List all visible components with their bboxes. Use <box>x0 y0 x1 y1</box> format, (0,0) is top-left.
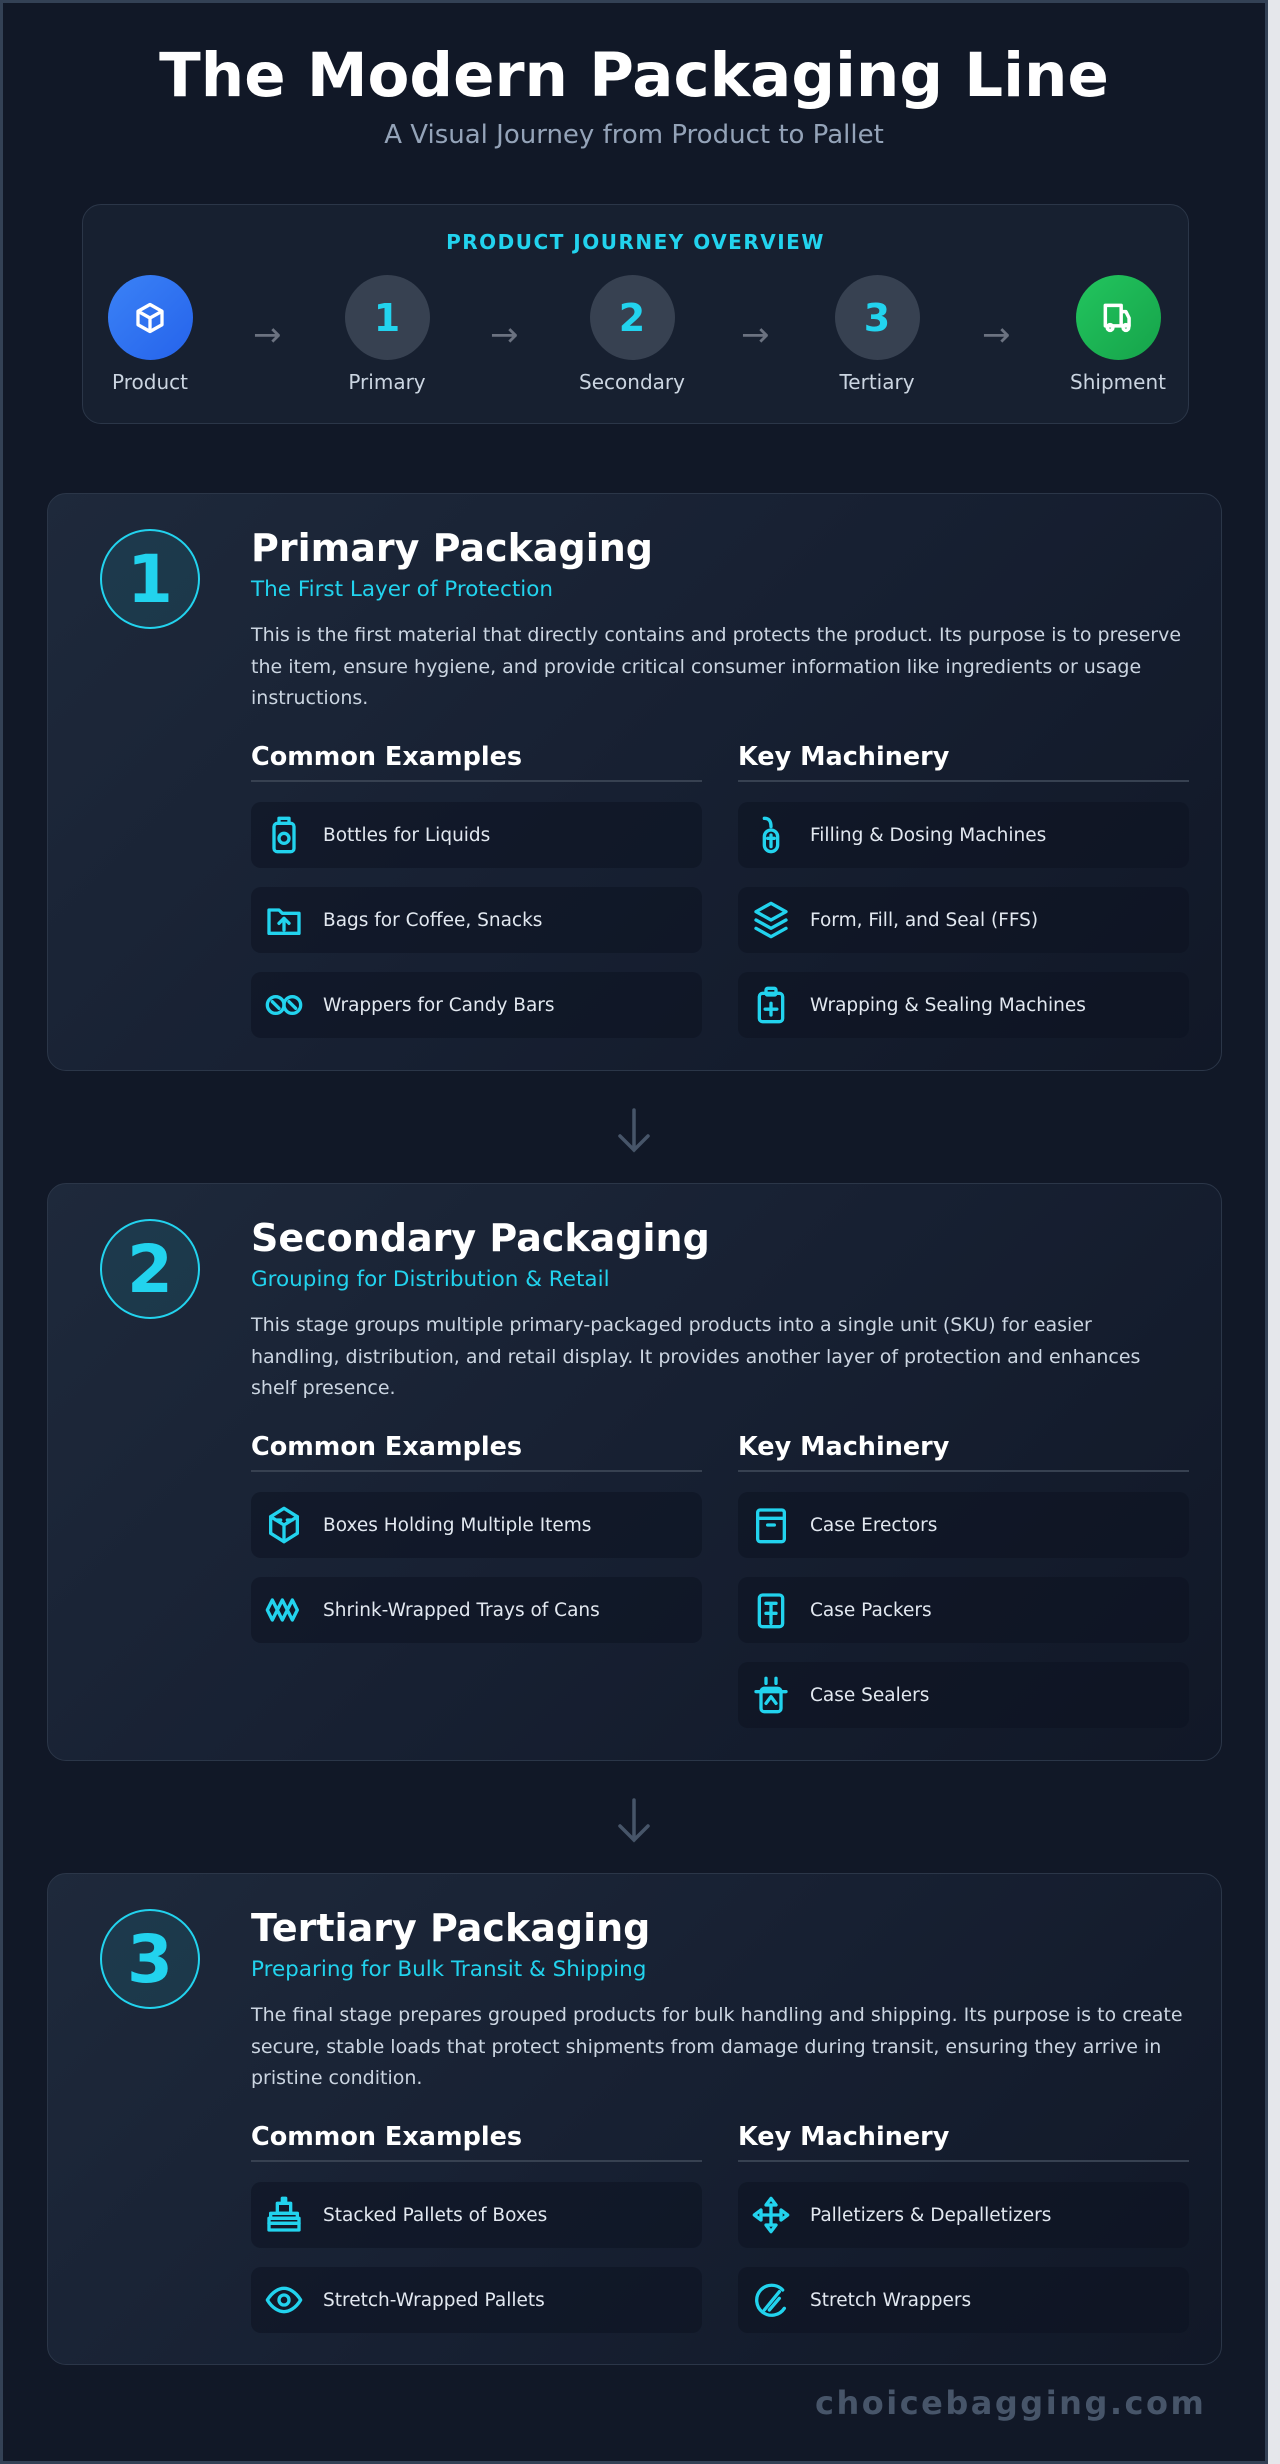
description: pristine condition. <box>251 2067 422 2089</box>
arrow: → <box>982 315 1010 355</box>
item: bottles: Bottles for Liquids <box>323 824 490 846</box>
item: trays: Shrink-Wrapped Trays of Cans <box>323 1600 600 1620</box>
description: instructions. <box>251 687 368 709</box>
column: key machinery: Key Machinery <box>738 742 949 772</box>
step number 1 <box>100 529 200 629</box>
subtitle: A Visual Journey from Product to Pallet <box>384 120 884 150</box>
step: tertiary <box>835 275 920 394</box>
column: common examples <box>251 742 702 1038</box>
arrow: → <box>490 315 518 355</box>
arrow: down <box>618 1108 650 1152</box>
item: wrappers <box>251 972 702 1038</box>
description: shelf presence. <box>251 1377 396 1399</box>
arrow: → <box>741 315 770 355</box>
step number 3: 3 <box>127 1920 173 1998</box>
item: wrappers: Wrappers for Candy Bars <box>323 994 555 1016</box>
step: secondary: 2 <box>619 296 645 340</box>
item: FFS: Form, Fill, and Seal (FFS) <box>810 910 1038 930</box>
description: secure, stable loads that protect shipments from damage during transit, ensuring they arrive in <box>251 2036 1161 2058</box>
step: primary: 1 <box>374 296 400 340</box>
column: common examples <box>251 2122 702 2333</box>
item: boxes: Boxes Holding Multiple Items <box>323 1514 591 1536</box>
item: stretch-wrapped pallets <box>251 2267 702 2333</box>
step number 2 <box>100 1219 200 1319</box>
panel: tertiary packaging <box>47 1873 1222 2365</box>
item: stretch wrappers: Stretch Wrappers <box>810 2290 971 2310</box>
step number 3 <box>100 1909 200 2009</box>
item: trays <box>251 1577 702 1643</box>
overview heading: PRODUCT JOURNEY OVERVIEW <box>446 230 825 254</box>
item: case packers <box>738 1577 1189 1643</box>
description <box>250 1314 1140 1399</box>
item: case erectors <box>738 1492 1189 1558</box>
item: stacked pallets: Stacked Pallets of Boxes <box>323 2204 547 2226</box>
item: stretch-wrapped pallets: Stretch-Wrapped Pallets <box>323 2290 545 2310</box>
title: The Modern Packaging Line <box>159 40 1109 111</box>
description <box>250 2004 1183 2089</box>
item: stretch wrappers <box>738 2267 1189 2333</box>
column: key machinery <box>738 2122 1189 2317</box>
column: common examples: Common Examples <box>251 1432 522 1462</box>
item: bags: Bags for Coffee, Snacks <box>323 910 542 930</box>
description: This is the first material that directly contains and protects the product. Its purpose is to preserve <box>251 624 1181 646</box>
step: secondary <box>579 275 685 394</box>
step: tertiary: Tertiary <box>839 370 915 394</box>
heading: Secondary Packaging <box>251 1216 710 1260</box>
subheading: Preparing for Bulk Transit & Shipping <box>251 1957 646 1982</box>
subheading: Grouping for Distribution & Retail <box>251 1267 610 1292</box>
description: handling, distribution, and retail display. It provides another layer of protection and enhances <box>251 1346 1140 1368</box>
item: case sealers: Case Sealers <box>810 1684 929 1706</box>
column: key machinery <box>738 1432 1189 1714</box>
item: bottles <box>251 802 702 868</box>
column: key machinery: Key Machinery <box>738 2122 949 2152</box>
column: common examples: Common Examples <box>251 742 522 772</box>
description: This stage groups multiple primary-packaged products into a single unit (SKU) for easier <box>251 1314 1092 1336</box>
item: boxes <box>251 1492 702 1558</box>
subheading: The First Layer of Protection <box>251 577 553 602</box>
step: secondary: Secondary <box>579 370 685 394</box>
step: shipment: Shipment <box>1070 370 1166 394</box>
step: tertiary: 3 <box>864 296 890 340</box>
column: key machinery: Key Machinery <box>738 1432 949 1462</box>
item: case sealers <box>738 1662 1189 1728</box>
step: product <box>108 275 193 394</box>
panel: product journey overview <box>82 204 1189 424</box>
description: the item, ensure hygiene, and provide critical consumer information like ingredients or usage <box>251 656 1141 678</box>
item: case erectors: Case Erectors <box>810 1514 937 1536</box>
item: case packers: Case Packers <box>810 1600 932 1620</box>
description <box>250 624 1181 709</box>
panel: primary packaging <box>47 493 1222 1071</box>
item: wrapping: Wrapping & Sealing Machines <box>810 994 1086 1016</box>
step: product: Product <box>112 370 188 394</box>
item: filling: Filling & Dosing Machines <box>810 824 1046 846</box>
step number 2: 2 <box>127 1230 173 1308</box>
arrow: down <box>618 1798 650 1842</box>
step number 1: 1 <box>127 540 173 618</box>
item: palletizers: Palletizers & Depalletizers <box>810 2204 1051 2226</box>
item: wrapping <box>738 972 1189 1038</box>
item: palletizers <box>738 2182 1189 2248</box>
item: filling <box>738 802 1189 868</box>
heading: Tertiary Packaging <box>251 1906 650 1950</box>
arrow: → <box>253 315 282 355</box>
column: common examples <box>251 1432 702 1643</box>
footer brand: choicebagging.com <box>815 2384 1206 2422</box>
item: bags <box>251 887 702 953</box>
description: The final stage prepares grouped products for bulk handling and shipping. Its purpose is to create <box>251 2004 1183 2026</box>
step: primary <box>345 275 430 394</box>
panel: secondary packaging <box>47 1183 1222 1761</box>
step: primary: Primary <box>348 370 426 394</box>
item: FFS <box>738 887 1189 953</box>
step: shipment <box>1070 275 1166 394</box>
item: stacked pallets <box>251 2182 702 2248</box>
heading: Primary Packaging <box>251 526 653 570</box>
column: key machinery <box>738 742 1189 1024</box>
column: common examples: Common Examples <box>251 2122 522 2152</box>
